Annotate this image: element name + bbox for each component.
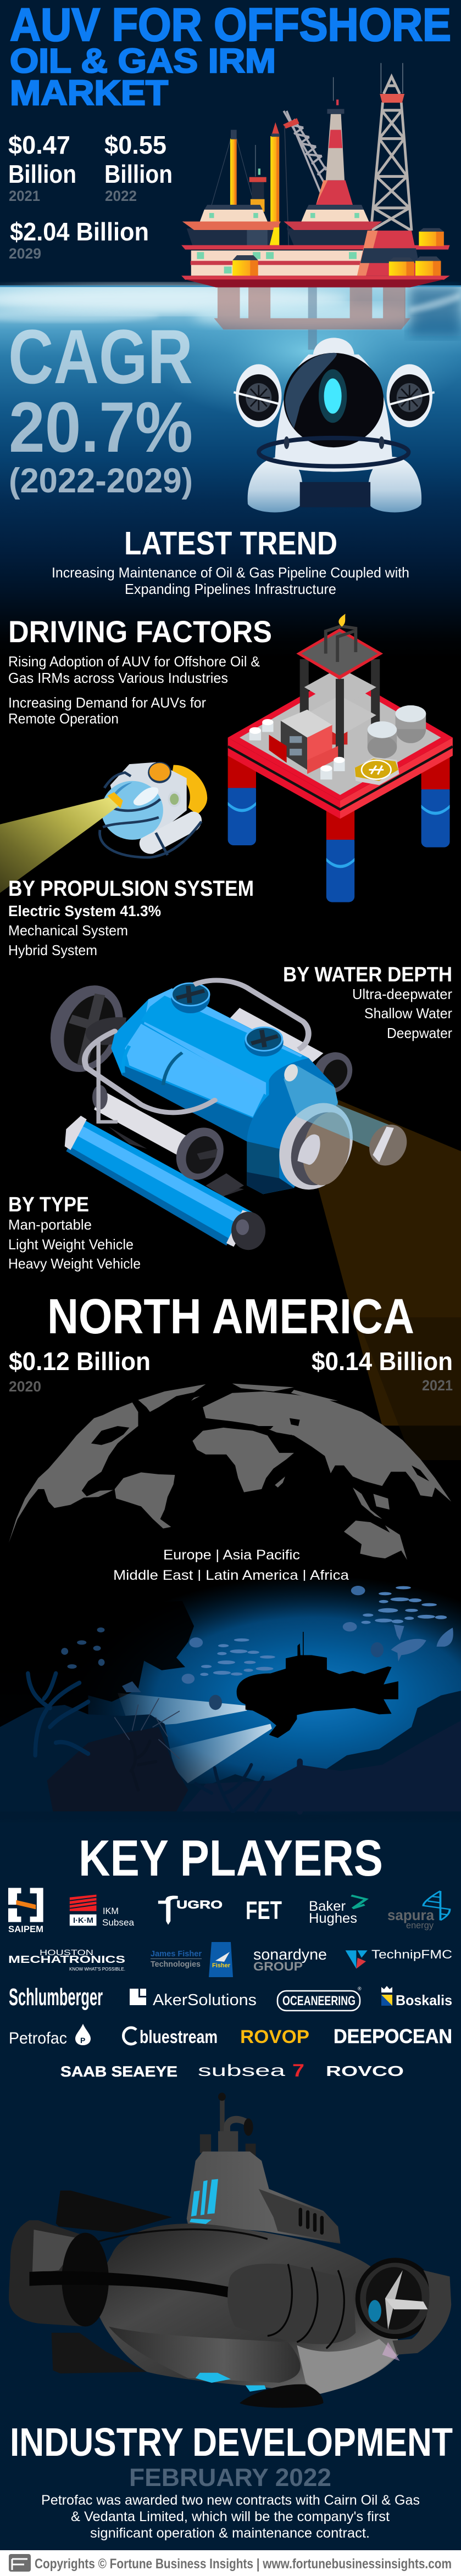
logo: Houston Mechatronics — [8, 1948, 125, 1972]
light beam — [0, 796, 122, 893]
dome — [284, 353, 384, 447]
body — [111, 988, 338, 1194]
gills — [299, 2208, 324, 2235]
logo: Sapura Energy — [387, 1891, 450, 1930]
by type: Man-portable — [8, 1216, 92, 1233]
by propulsion system: Hybrid System — [8, 942, 97, 958]
CAGR: 20.7% — [9, 387, 193, 467]
regional values — [9, 1347, 453, 1395]
red tower — [316, 180, 353, 205]
logo: Houston Mechatronics: MECHATRONICS — [8, 1954, 125, 1965]
logo: ROVOP: ROVOP — [240, 2027, 309, 2047]
logo: Boskalis: Boskalis — [396, 1992, 452, 2008]
sail — [187, 2152, 341, 2244]
reef — [0, 1691, 461, 1811]
driving factors: Rising Adoption of AUV for Offshore Oil & — [8, 653, 260, 670]
by propulsion system: Mechanical System — [8, 922, 128, 939]
heading: key players: KEY PLAYERS — [79, 1829, 383, 1887]
logo: Houston Mechatronics: KNOW WHAT'S POSSIBLE. — [69, 1967, 125, 1972]
by water depth: Shallow Water — [364, 1005, 452, 1022]
logo: Oceaneering: OCEANEERING — [282, 1994, 356, 2008]
cyan windows — [190, 2179, 266, 2392]
logo: DeepOcean: DEEPOCEAN — [334, 2025, 452, 2047]
tanks — [249, 705, 426, 779]
latest trend: Expanding Pipelines Infrastructure — [125, 581, 336, 597]
date: FEBRUARY 2022 — [129, 2463, 331, 2491]
industry development — [10, 2421, 453, 2541]
deck top — [228, 673, 453, 800]
other regions: Middle East | Latin America | Africa — [113, 1568, 349, 1583]
by water depth: Deepwater — [387, 1025, 452, 1041]
logo: Houston Mechatronics: HOUSTON — [40, 1948, 93, 1957]
logo: Subsea 7: 7 — [292, 2061, 304, 2080]
logo: Bluestream: bluestream — [140, 2027, 218, 2047]
logo: Schlumberger: Schlumberger — [9, 1984, 103, 2011]
dark overhang — [0, 1601, 194, 1759]
by water depth — [283, 963, 452, 1041]
logo: James Fisher Technologies — [151, 1942, 233, 1977]
development text: Petrofac was awarded two new contracts with Cairn Oil & Gas — [41, 2493, 420, 2508]
logo: IKM Subsea: I·K·M — [73, 1916, 93, 1924]
logo: James Fisher Technologies: Technologies — [151, 1960, 201, 1969]
illustration: underwater reef scene — [0, 1575, 461, 1833]
branching corals — [28, 1674, 309, 1811]
logo: Sapura Energy: energy — [406, 1920, 434, 1930]
by propulsion system — [8, 877, 254, 958]
lower pods — [248, 457, 303, 512]
development text — [41, 2493, 420, 2541]
submersible silhouette — [237, 1632, 398, 1738]
bottom foot — [240, 2384, 323, 2408]
CAGR: (2022-2029) — [9, 462, 193, 500]
logo: Aker Solutions: AkerSolutions — [153, 1991, 257, 2009]
periscope — [200, 2093, 256, 2156]
logo: James Fisher Technologies: James Fisher — [151, 1949, 202, 1958]
driving factors: Remote Operation — [8, 710, 119, 727]
side pod — [227, 2264, 356, 2344]
logo: Fugro: UGRO — [176, 1899, 223, 1911]
helipad — [354, 757, 399, 785]
logo: TechnipFMC: TechnipFMC — [371, 1948, 452, 1961]
deck sides — [228, 738, 340, 819]
illustration: white underwater robot with blue eye — [234, 338, 435, 512]
driving factors: Increasing Demand for AUVs for — [8, 694, 206, 711]
logo: Boskalis — [381, 1986, 452, 2008]
title: OIL & GAS IRM — [10, 42, 276, 80]
latest trend: LATEST TREND — [124, 525, 337, 562]
side tube — [29, 2271, 235, 2298]
by type — [8, 1193, 141, 1272]
logo: Subsea 7 — [198, 2061, 304, 2080]
illustration: isometric offshore platform — [228, 614, 453, 902]
driving factors: Gas IRMs across Various Industries — [8, 670, 228, 686]
legs — [228, 753, 450, 902]
top fans — [171, 983, 284, 1057]
world map — [9, 1384, 451, 1560]
latest trend — [52, 525, 409, 597]
hull — [91, 2224, 401, 2394]
driving factors — [8, 614, 272, 727]
footer — [0, 2550, 461, 2576]
main deck — [181, 276, 450, 280]
rear fins — [56, 2191, 172, 2233]
by water depth: Ultra-deepwater — [352, 986, 452, 1002]
logo: Saipem — [8, 1888, 43, 1934]
logo: Sonardyne Group: GROUP — [253, 1960, 303, 1973]
logo: TechnipFMC — [346, 1948, 452, 1969]
flare — [338, 614, 346, 627]
background: sky, water and deep sea — [0, 0, 461, 659]
other regions: Europe | Asia Pacific — [163, 1547, 300, 1563]
logo: Baker Hughes: Baker — [309, 1899, 346, 1914]
title — [10, 0, 451, 113]
small lens — [364, 1121, 412, 1169]
logo: IKM Subsea: Subsea — [102, 1917, 135, 1928]
ring — [259, 438, 409, 467]
logo: Rovco: ROVCO — [326, 2063, 404, 2079]
logo: Petrofac — [9, 2024, 91, 2047]
market size figures — [8, 131, 173, 262]
side tube — [68, 1118, 253, 1245]
development text: significant operation & maintenance contract. — [90, 2526, 370, 2541]
bottom navy background — [0, 1822, 461, 2550]
logo: Baker Hughes: Hughes — [309, 1911, 357, 1926]
submerged legs — [214, 287, 410, 350]
amber beam — [318, 1100, 461, 1426]
market size figures: 2021 — [9, 188, 40, 204]
by type: Light Weight Vehicle — [8, 1236, 134, 1253]
logo: James Fisher Technologies: Fisher — [212, 1962, 231, 1969]
crane — [284, 111, 328, 192]
headlamp beam — [284, 1065, 394, 1149]
latest trend: Increasing Maintenance of Oil & Gas Pipeline Coupled with — [52, 564, 409, 581]
market size figures: $0.47 — [8, 131, 70, 159]
illustration: small AUV with yellow light beam — [0, 762, 207, 893]
derrick — [371, 76, 412, 231]
logo: Saipem: SAIPEM — [8, 1924, 43, 1934]
by propulsion system: Electric System 41.3% — [8, 902, 161, 919]
lower thruster — [170, 1123, 230, 1184]
logo: Oceaneering — [277, 1986, 362, 2011]
logo: Sonardyne Group: sonardyne — [253, 1946, 327, 1963]
rear shroud — [9, 2220, 85, 2327]
tanks — [232, 232, 444, 276]
derrick base — [357, 231, 421, 276]
market size figures: 2022 — [105, 188, 137, 204]
hull stripes — [187, 228, 279, 246]
footer logo — [9, 2554, 31, 2572]
robot body — [275, 355, 392, 472]
rear thruster — [40, 979, 134, 1079]
right thruster — [308, 1048, 358, 1097]
logo: IKM Subsea — [70, 1895, 135, 1928]
glowing eye — [324, 378, 342, 414]
tower top — [296, 628, 383, 680]
lower cylinder — [94, 1090, 205, 1161]
logo: Aker Solutions — [130, 1989, 257, 2009]
building — [281, 710, 332, 738]
market size figures: $0.55 — [104, 131, 166, 159]
rear top cylinder — [229, 1008, 323, 1063]
masts — [212, 139, 231, 205]
market size figures: $2.04 Billion — [10, 217, 149, 246]
fish — [61, 1586, 453, 1710]
logo: Petrofac: P — [80, 2036, 85, 2045]
market size figures: Billion — [8, 160, 76, 188]
driving factors: DRIVING FACTORS — [8, 614, 272, 649]
by type: Heavy Weight Vehicle — [8, 1255, 141, 1272]
illustration: black submarine — [9, 2093, 451, 2408]
title: MARKET — [10, 73, 168, 113]
by propulsion system: BY PROPULSION SYSTEM — [8, 877, 254, 901]
regional values: $0.12 Billion — [9, 1347, 151, 1376]
by type: BY TYPE — [8, 1193, 89, 1216]
regional values: 2021 — [422, 1377, 453, 1394]
market size figures: Billion — [104, 160, 173, 188]
heading: North America: NORTH AMERICA — [47, 1289, 414, 1344]
logo: IKM Subsea: IKM — [103, 1906, 119, 1916]
logo: Baker Hughes — [309, 1895, 366, 1926]
front lens — [268, 1096, 364, 1197]
regional values: $0.14 Billion — [312, 1347, 453, 1376]
illustration: offshore oil rig — [181, 63, 450, 350]
other regions — [113, 1547, 349, 1583]
logo: Petrofac: Petrofac — [9, 2029, 67, 2047]
regional values: 2020 — [9, 1378, 41, 1395]
fans — [234, 364, 435, 427]
logo: Sapura Energy: sapura — [387, 1907, 435, 1923]
logo: Saab Seaeye: SAAB SEAEYE — [60, 2063, 177, 2080]
CAGR: CAGR — [8, 313, 193, 400]
water surface highlights — [0, 280, 461, 423]
CAGR — [8, 313, 193, 500]
logo: Subsea 7: subsea — [198, 2062, 285, 2080]
light beams — [118, 1693, 247, 1727]
logo: Bluestream — [123, 2027, 218, 2047]
logo: Sonardyne Group — [253, 1946, 327, 1973]
illustration: blue ROV with amber beam — [40, 979, 461, 1426]
amber beam fade behind region heading — [357, 1317, 461, 1460]
development text: & Vedanta Limited, which will be the company's first — [71, 2509, 390, 2524]
front thruster — [358, 2260, 451, 2361]
market size figures: 2029 — [9, 245, 41, 262]
logo: Fugro — [158, 1896, 223, 1925]
grab rail — [194, 980, 308, 1050]
tower legs and floors — [300, 659, 380, 760]
logo: Oceaneering: ® — [358, 1986, 362, 1991]
logo: FET: FET — [246, 1896, 282, 1924]
